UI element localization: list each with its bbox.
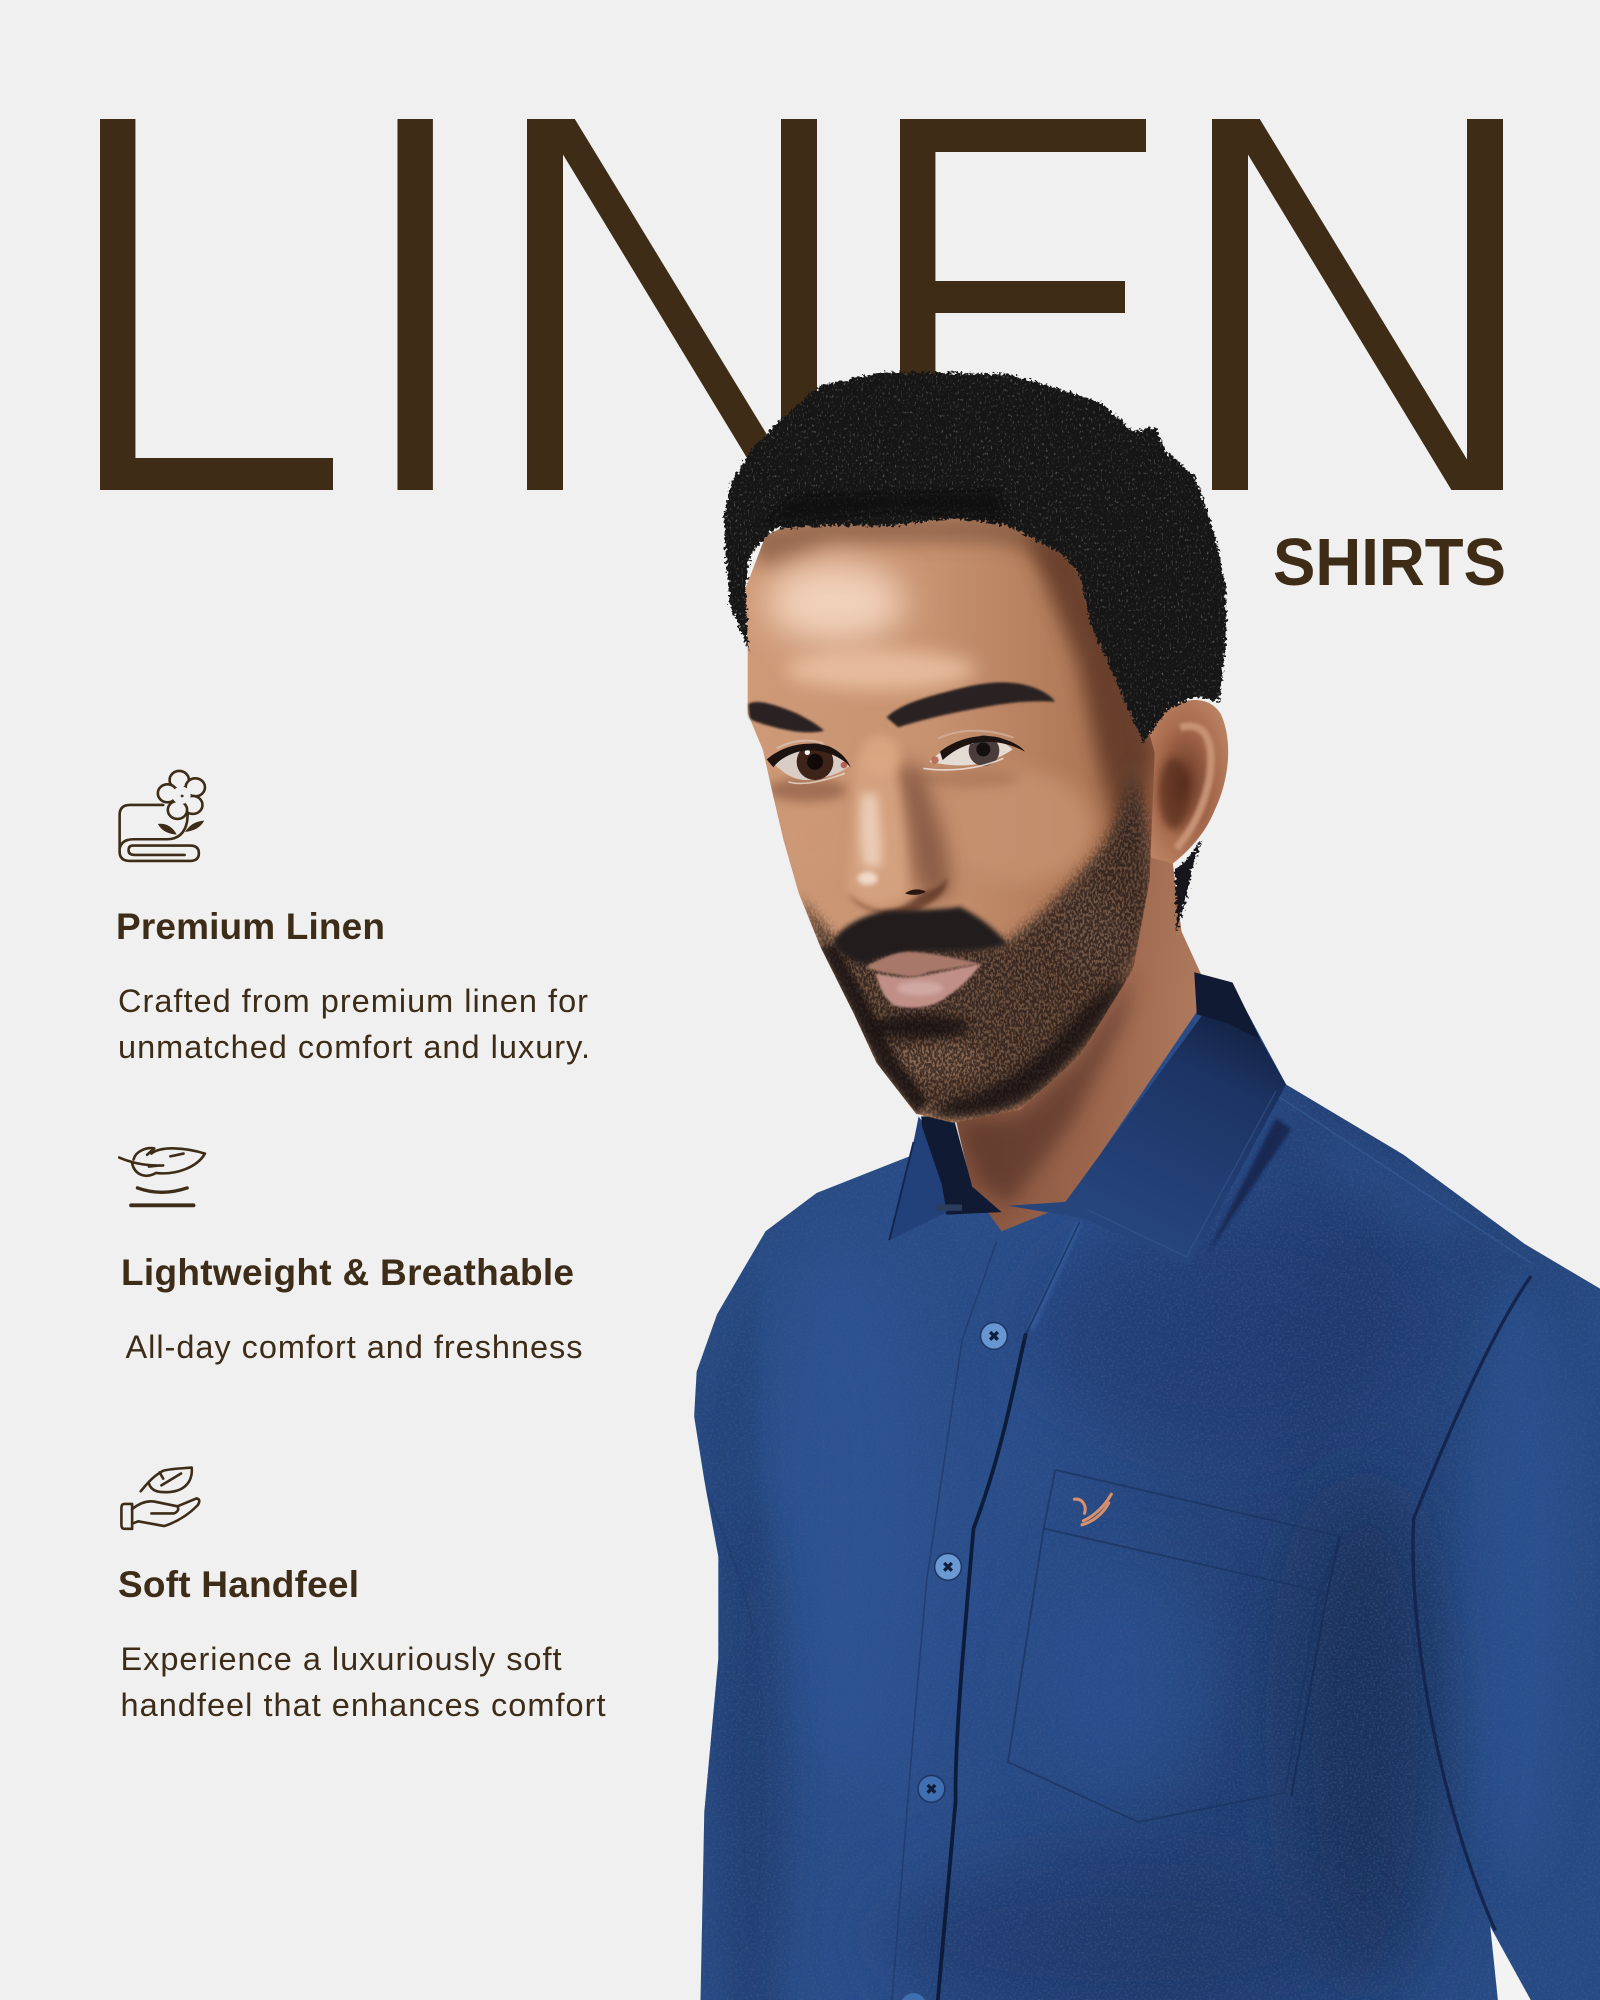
neck shadow bbox=[957, 972, 1136, 1206]
left collar inner bbox=[921, 1116, 1002, 1215]
feature: Premium Linen bbox=[116, 771, 590, 1065]
logo embroidery bbox=[1074, 1494, 1111, 1525]
collar bbox=[889, 972, 1291, 1266]
left collar leaf bbox=[889, 1116, 947, 1240]
hair bbox=[715, 364, 1231, 746]
face bbox=[745, 516, 1154, 1123]
feature: Soft Handfeel bbox=[118, 1468, 606, 1723]
beard lights and darks bbox=[820, 890, 1130, 1117]
feature: Lightweight & Breathable bbox=[119, 1148, 583, 1365]
left eye bbox=[767, 741, 851, 783]
wedge of background between sleeve and body bbox=[1490, 1927, 1531, 2000]
title: LINEN: LINEN bbox=[48, 0, 1552, 618]
description: unmatched comfort and luxury. bbox=[118, 1029, 590, 1065]
mustache bbox=[833, 907, 1007, 964]
title: Soft Handfeel bbox=[118, 1564, 359, 1605]
beard base bbox=[799, 757, 1151, 1117]
description: All-day comfort and freshness bbox=[126, 1329, 582, 1365]
sleeve seam bbox=[1413, 1276, 1531, 1930]
yoke stitch bbox=[1276, 1095, 1531, 1263]
heading: SHIRTS: SHIRTS bbox=[1273, 525, 1506, 600]
description: Experience a luxuriously soft bbox=[120, 1641, 562, 1677]
title: Premium Linen bbox=[116, 906, 385, 947]
ear bbox=[1143, 700, 1228, 864]
right eye bbox=[923, 731, 1025, 770]
forehead lighting bbox=[752, 516, 1154, 832]
hair behind ear bbox=[1175, 840, 1202, 933]
icon: hand with leaf bbox=[121, 1468, 199, 1529]
neck bbox=[953, 836, 1222, 1240]
left sleeve fold bbox=[706, 1488, 754, 1633]
description: handfeel that enhances comfort bbox=[120, 1687, 606, 1723]
placket and button stand bbox=[892, 1222, 1079, 2000]
back collar bbox=[1194, 972, 1261, 1040]
cheek and nose modelling bbox=[767, 735, 1093, 904]
buttons bbox=[901, 1322, 1007, 2000]
fabric shading bbox=[702, 1111, 1572, 2000]
nose base bbox=[847, 877, 947, 915]
photo: man wearing blue linen shirt bbox=[689, 364, 1600, 2000]
lower face, drawn in detail coordinates bbox=[767, 735, 1151, 1118]
icon: towel with flower bbox=[120, 771, 205, 861]
right collar leaf bbox=[1008, 1016, 1286, 1266]
brows bbox=[748, 682, 1055, 732]
nostril bbox=[905, 889, 926, 895]
shirt bbox=[689, 970, 1600, 2000]
description: Crafted from premium linen for bbox=[118, 983, 588, 1019]
pocket bbox=[1008, 1470, 1340, 1822]
lips bbox=[866, 952, 981, 1008]
beard stubble bbox=[799, 780, 1151, 1118]
icon: feather bbox=[119, 1148, 205, 1205]
title: Lightweight & Breathable bbox=[121, 1252, 574, 1293]
